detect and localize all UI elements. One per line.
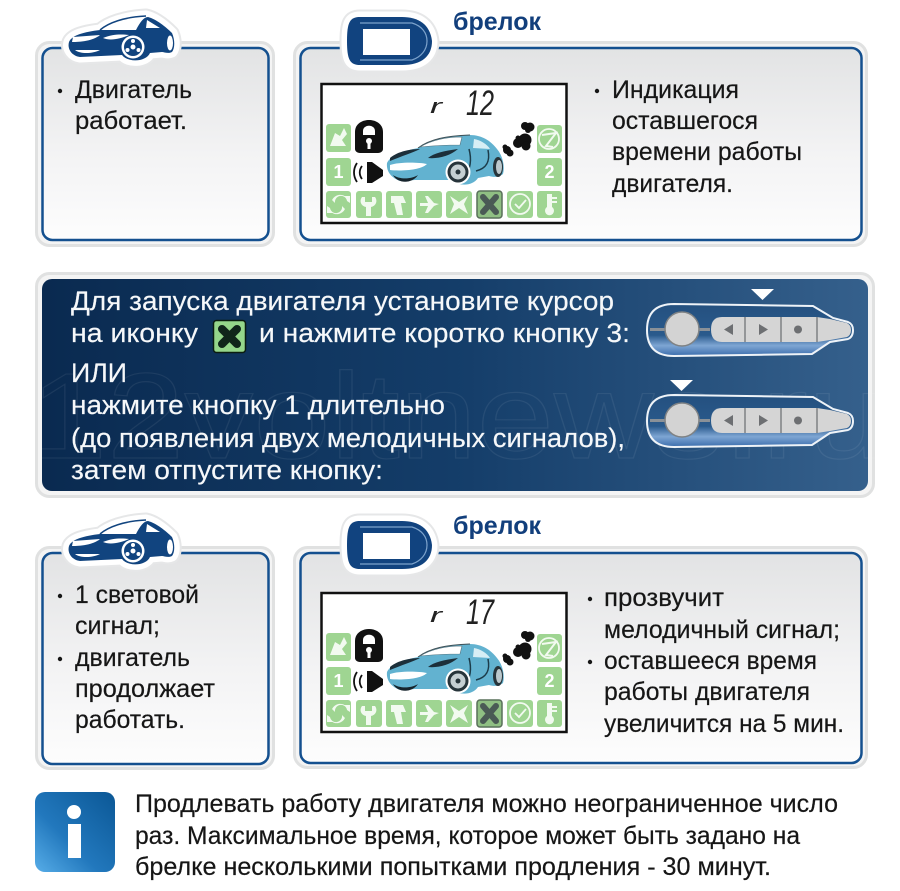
LCD display: 17: [466, 593, 495, 632]
text: fob result: оставшееся время: [604, 647, 817, 675]
icon: key fob: [347, 17, 432, 65]
text: engine running: [58, 76, 192, 135]
text: fob result: увеличится на 5 мин.: [604, 710, 844, 738]
text: remaining time: оставшегося: [612, 107, 758, 135]
text: note: [135, 790, 838, 881]
text: car result: работать.: [75, 706, 185, 734]
icon: info: [35, 792, 115, 872]
LCD display: 2: [544, 671, 555, 691]
text: long press: затем отпустите кнопку:: [71, 455, 383, 485]
text: fob result: работы двигателя: [604, 678, 810, 706]
panel: instructions: [30, 274, 885, 496]
icon: car: [69, 520, 174, 564]
LCD display: 1: [333, 162, 344, 182]
icon: fan: [214, 320, 246, 352]
text: car result: двигатель: [75, 644, 190, 672]
heading: fob: брелок: [453, 512, 541, 540]
text: set cursor: на иконку: [71, 318, 199, 348]
text: car result: 1 световой: [75, 581, 199, 609]
text: engine running: работает.: [75, 107, 187, 135]
text: car result: [58, 581, 216, 734]
panel: car result: [36, 520, 274, 768]
text: long press: [71, 358, 625, 485]
text: set cursor: Для запуска двигателя установите курсор: [71, 286, 614, 316]
text: fob result: мелодичный сигнал;: [604, 616, 840, 644]
text: long press: нажмите кнопку 1 длительно: [71, 390, 445, 420]
text: note: Продлевать работу двигателя можно неограниченное число: [135, 790, 838, 818]
text: remaining time: Индикация: [612, 76, 739, 104]
LCD display: 1: [333, 671, 344, 691]
text: long press: ИЛИ: [71, 358, 127, 388]
LCD display: 2: [544, 162, 555, 182]
diagram: button 3 press: [647, 289, 853, 356]
LCD display: r: [430, 96, 444, 118]
diagram: button 1 press: [647, 380, 853, 447]
panel: fob result: [294, 512, 866, 768]
text: remaining time: двигателя.: [612, 170, 733, 198]
heading: fob: брелок: [453, 8, 541, 36]
text: car result: продолжает: [75, 675, 216, 703]
LCD display: [322, 84, 566, 223]
text: remaining time: времени работы: [612, 138, 802, 166]
watermark: 12voltnews.ru: [30, 348, 885, 484]
text: car result: сигнал;: [75, 612, 160, 640]
text: fob result: [588, 584, 844, 738]
icon: car: [69, 16, 174, 60]
text: set cursor: и нажмите коротко кнопку 3:: [259, 318, 630, 348]
LCD display: [322, 593, 566, 732]
panel: key fob remaining time: [294, 8, 866, 246]
panel: car engine running: [36, 16, 274, 246]
LCD display: r: [430, 605, 444, 627]
text: set cursor: [71, 286, 630, 348]
text: long press: (до появления двух мелодичных сигналов),: [71, 423, 625, 453]
text: fob result: прозвучит: [604, 584, 725, 612]
text: note: брелке несколькими попытками продления - 30 минут.: [135, 853, 771, 881]
text: engine running: Двигатель: [75, 76, 192, 104]
text: note: раз. Максимальное время, которое может быть задано на: [135, 822, 800, 850]
icon: key fob: [347, 521, 432, 569]
text: remaining time: [595, 76, 802, 198]
LCD display: 12: [466, 84, 494, 123]
